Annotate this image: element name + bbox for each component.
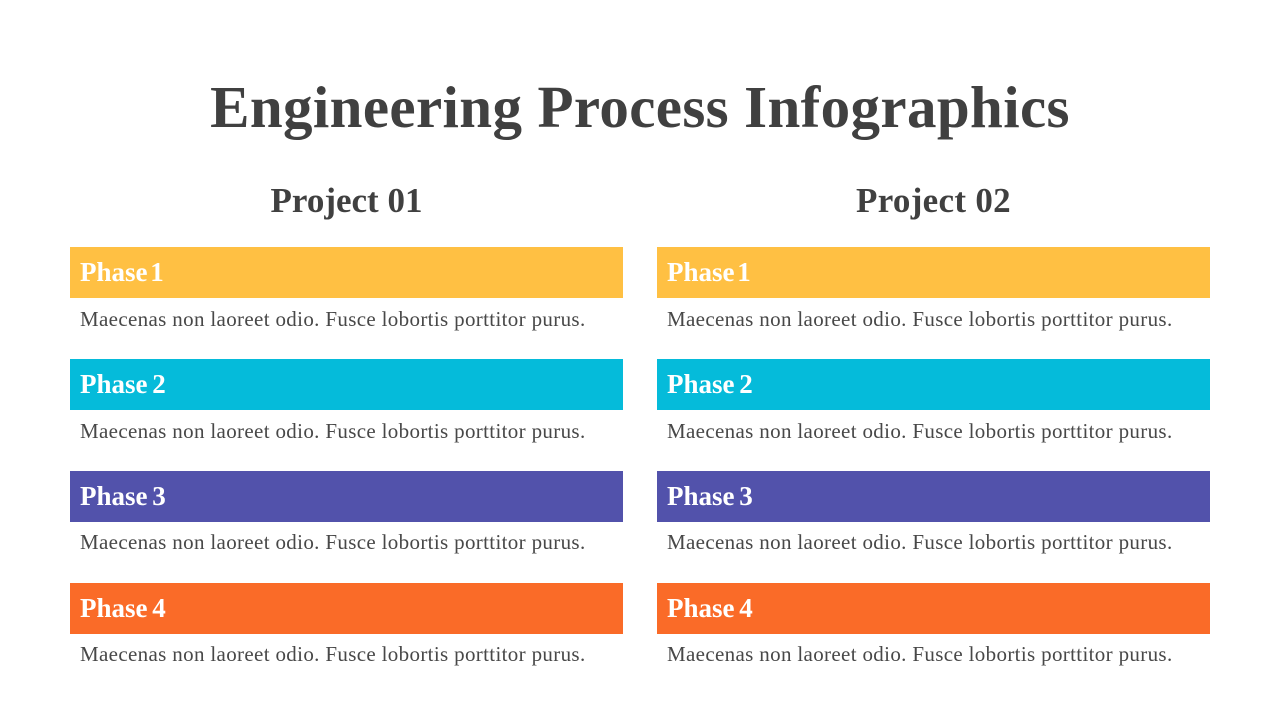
phase 1 text: Maecenas non laoreet odio. Fusce lobortis porttitor purus. (667, 307, 1173, 331)
phase 4 bar (657, 583, 1210, 634)
phase 4 text: Maecenas non laoreet odio. Fusce lobortis porttitor purus. (667, 642, 1173, 666)
phase 1 bar: Phase 1 (667, 257, 751, 287)
phase 4 bar: Phase 4 (80, 593, 166, 623)
phase 3 bar: Phase 3 (667, 481, 753, 511)
phase 4 text: Maecenas non laoreet odio. Fusce lobortis porttitor purus. (80, 642, 586, 666)
phase 2 text: Maecenas non laoreet odio. Fusce lobortis porttitor purus. (80, 419, 586, 443)
phase 2 bar (657, 359, 1210, 410)
phase 1 bar (657, 247, 1210, 298)
phase 3 bar: Phase 3 (80, 481, 166, 511)
phase 2 bar (70, 359, 623, 410)
phase 1 bar: Phase 1 (80, 257, 164, 287)
phase 2 text: Maecenas non laoreet odio. Fusce lobortis porttitor purus. (667, 419, 1173, 443)
phase 3 text: Maecenas non laoreet odio. Fusce lobortis porttitor purus. (667, 530, 1173, 554)
panel: project 01 (70, 181, 623, 666)
phase 1 text: Maecenas non laoreet odio. Fusce lobortis porttitor purus. (80, 307, 586, 331)
phase 2 bar: Phase 2 (80, 369, 166, 399)
phase 3 bar (657, 471, 1210, 522)
title: Engineering Process Infographics (210, 74, 1070, 140)
phase 4 bar: Phase 4 (667, 593, 753, 623)
phase 3 text: Maecenas non laoreet odio. Fusce lobortis porttitor purus. (80, 530, 586, 554)
panel: project 02 (657, 181, 1210, 666)
phase 1 bar (70, 247, 623, 298)
phase 3 bar (70, 471, 623, 522)
phase 2 bar: Phase 2 (667, 369, 753, 399)
heading: project 02: Project 02 (856, 181, 1011, 220)
phase 4 bar (70, 583, 623, 634)
heading: project 01: Project 01 (271, 181, 422, 220)
